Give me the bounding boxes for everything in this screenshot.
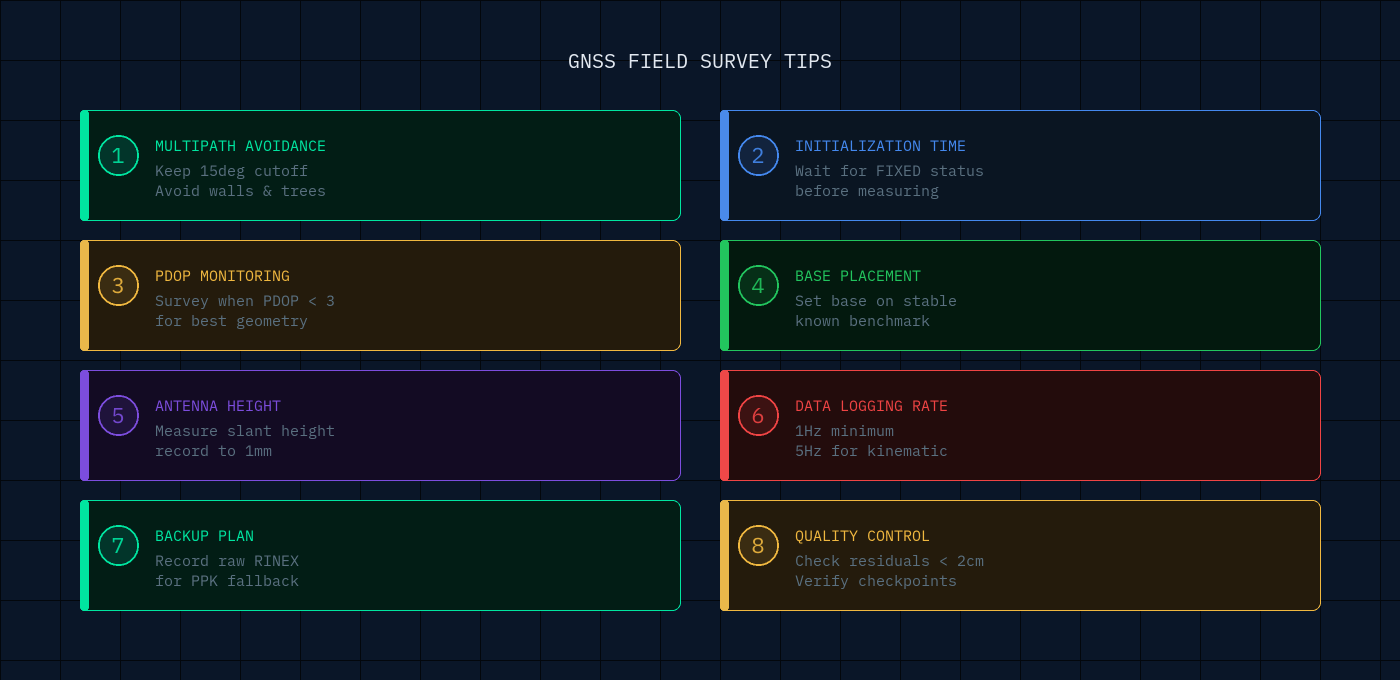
panel: tip 8 quality control: Check residuals < 2cm <box>795 552 984 571</box>
panel: tip 7 backup plan: Record raw RINEX <box>155 552 299 571</box>
panel: tip 4 base placement: BASE PLACEMENT <box>795 267 921 286</box>
panel: tip 3 pdop monitoring: 3 <box>111 271 125 300</box>
panel: tip 2 initialization time <box>720 110 1320 221</box>
panel: tip 5 antenna height: ANTENNA HEIGHT <box>155 397 281 416</box>
panel: tip 2 initialization time: Wait for FIXED status <box>795 162 984 181</box>
panel: tip 2 initialization time: 2 <box>751 141 765 170</box>
panel: tip 3 pdop monitoring: Survey when PDOP < 3 <box>155 292 335 311</box>
panel: tip 1 multipath avoidance: 1 <box>111 141 125 170</box>
panel: tip 5 antenna height: record to 1mm <box>155 442 272 461</box>
panel: tip 8 quality control <box>720 500 1320 611</box>
panel: tip 1 multipath avoidance: Avoid walls & trees <box>155 182 326 201</box>
panel: tip 8 quality control: 8 <box>751 531 765 560</box>
panel: tip 4 base placement <box>720 240 1320 351</box>
panel: tip 2 initialization time: INITIALIZATION TIME <box>795 137 966 156</box>
panel: tip 1 multipath avoidance <box>80 110 680 221</box>
panel: tip 6 data logging rate: 5Hz for kinematic <box>795 442 948 461</box>
panel: tip 7 backup plan: for PPK fallback <box>155 572 299 591</box>
panel: tip 5 antenna height: Measure slant height <box>155 422 335 441</box>
panel: tip 5 antenna height <box>80 370 680 481</box>
panel: tip 4 base placement: known benchmark <box>795 312 930 331</box>
panel: tip 1 multipath avoidance: MULTIPATH AVOIDANCE <box>155 137 326 156</box>
title: GNSS FIELD SURVEY TIPS <box>568 47 832 74</box>
panel: tip 8 quality control: QUALITY CONTROL <box>795 527 930 546</box>
panel: tip 6 data logging rate <box>720 370 1320 481</box>
panel: tip 3 pdop monitoring <box>80 240 680 351</box>
panel: tip 3 pdop monitoring: PDOP MONITORING <box>155 267 290 286</box>
panel: tip 6 data logging rate: 1Hz minimum <box>795 422 894 441</box>
panel: tip 8 quality control: Verify checkpoints <box>795 572 957 591</box>
panel: tip 4 base placement: Set base on stable <box>795 292 957 311</box>
panel: tip 6 data logging rate: 6 <box>751 401 765 430</box>
panel: tip 3 pdop monitoring: for best geometry <box>155 312 308 331</box>
panel: tip 7 backup plan: 7 <box>111 531 125 560</box>
panel: tip 4 base placement: 4 <box>751 271 765 300</box>
panel: tip 6 data logging rate: DATA LOGGING RATE <box>795 397 948 416</box>
panel: tip 7 backup plan <box>80 500 680 611</box>
panel: tip 1 multipath avoidance: Keep 15deg cutoff <box>155 162 308 181</box>
panel: tip 7 backup plan: BACKUP PLAN <box>155 527 254 546</box>
panel: tip 2 initialization time: before measuring <box>795 182 939 201</box>
panel: tip 5 antenna height: 5 <box>111 401 125 430</box>
